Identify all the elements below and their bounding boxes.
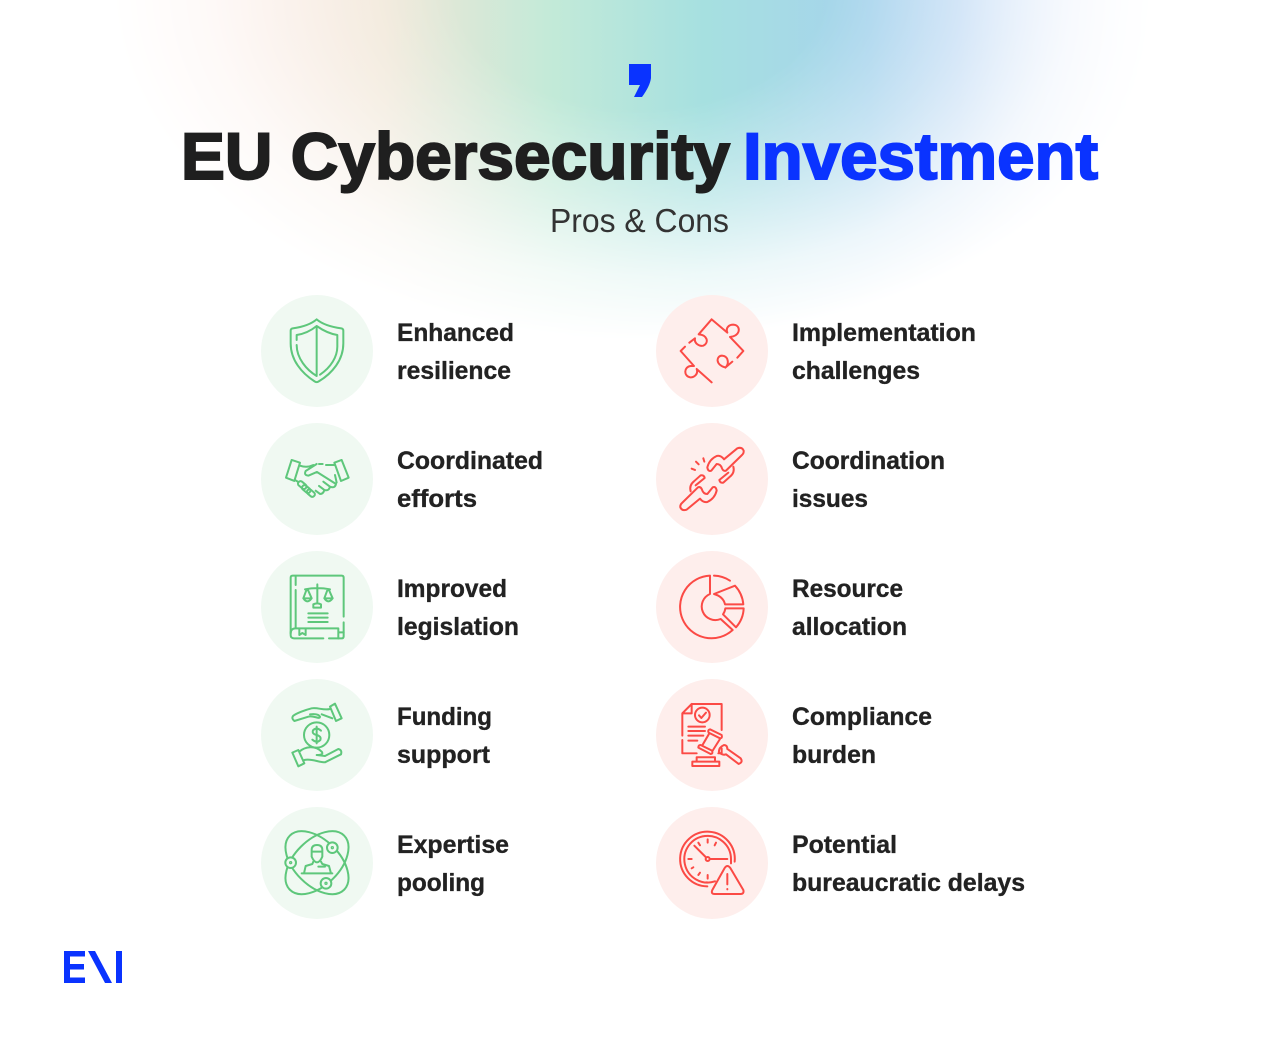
title xyxy=(181,119,1098,193)
label: bureaucratic delays xyxy=(792,869,1025,897)
label: Expertise xyxy=(397,831,509,859)
label xyxy=(792,447,945,513)
title: Investment xyxy=(743,119,1098,193)
label: resilience xyxy=(397,357,511,385)
icon circle xyxy=(261,551,373,663)
label: Resource xyxy=(792,575,903,603)
icon: law book xyxy=(291,576,344,638)
icon circle xyxy=(261,295,373,407)
icon: document and gavel xyxy=(682,704,742,766)
icon: quotation mark xyxy=(629,64,651,97)
item: Compliance burden xyxy=(656,679,932,791)
icon: clock with warning xyxy=(680,832,744,894)
icon circle xyxy=(656,423,768,535)
label xyxy=(397,319,514,385)
label: allocation xyxy=(792,613,907,641)
label: Coordination xyxy=(792,447,945,475)
icon circle xyxy=(656,551,768,663)
item: Coordinated efforts xyxy=(261,423,543,535)
label: Implementation xyxy=(792,319,976,347)
item: Expertise pooling xyxy=(261,807,509,919)
icon circle xyxy=(261,807,373,919)
label: Potential xyxy=(792,831,897,859)
icon circle xyxy=(656,807,768,919)
label xyxy=(792,575,907,641)
icon circle xyxy=(261,679,373,791)
label: challenges xyxy=(792,357,920,385)
label xyxy=(397,447,543,513)
item: Implementation challenges xyxy=(656,295,976,407)
icon: atom with expert xyxy=(274,820,360,906)
label xyxy=(792,703,932,769)
item: Funding support xyxy=(261,679,492,791)
label: Coordinated xyxy=(397,447,543,475)
label xyxy=(397,703,492,769)
item: Resource allocation xyxy=(656,551,907,663)
icon: shield xyxy=(291,319,343,382)
label: efforts xyxy=(397,485,477,513)
logo xyxy=(64,951,122,983)
label: burden xyxy=(792,741,876,769)
label: pooling xyxy=(397,869,485,897)
label xyxy=(792,319,976,385)
subtitle: Pros & Cons xyxy=(550,202,729,239)
label: support xyxy=(397,741,491,769)
item: Potential bureaucratic delays xyxy=(656,807,1025,919)
label xyxy=(397,831,509,897)
item: Enhanced resilience xyxy=(261,295,514,407)
label xyxy=(792,831,1025,897)
icon: puzzle piece xyxy=(681,319,743,382)
label: Improved xyxy=(397,575,507,603)
icon circle xyxy=(656,295,768,407)
icon: broken chain xyxy=(680,448,744,510)
label: Compliance xyxy=(792,703,932,731)
label xyxy=(397,575,519,641)
icon circle xyxy=(656,679,768,791)
label: issues xyxy=(792,485,868,513)
item: Improved legislation xyxy=(261,551,519,663)
item: Coordination issues xyxy=(656,423,945,535)
label: legislation xyxy=(397,613,519,641)
label: Funding xyxy=(397,703,492,731)
icon: handshake xyxy=(286,460,349,498)
icon: donut chart xyxy=(680,576,744,638)
icon: hands with coin xyxy=(292,704,342,766)
label: Enhanced xyxy=(397,319,514,347)
icon circle xyxy=(261,423,373,535)
title: EU Cybersecurity xyxy=(181,119,730,193)
